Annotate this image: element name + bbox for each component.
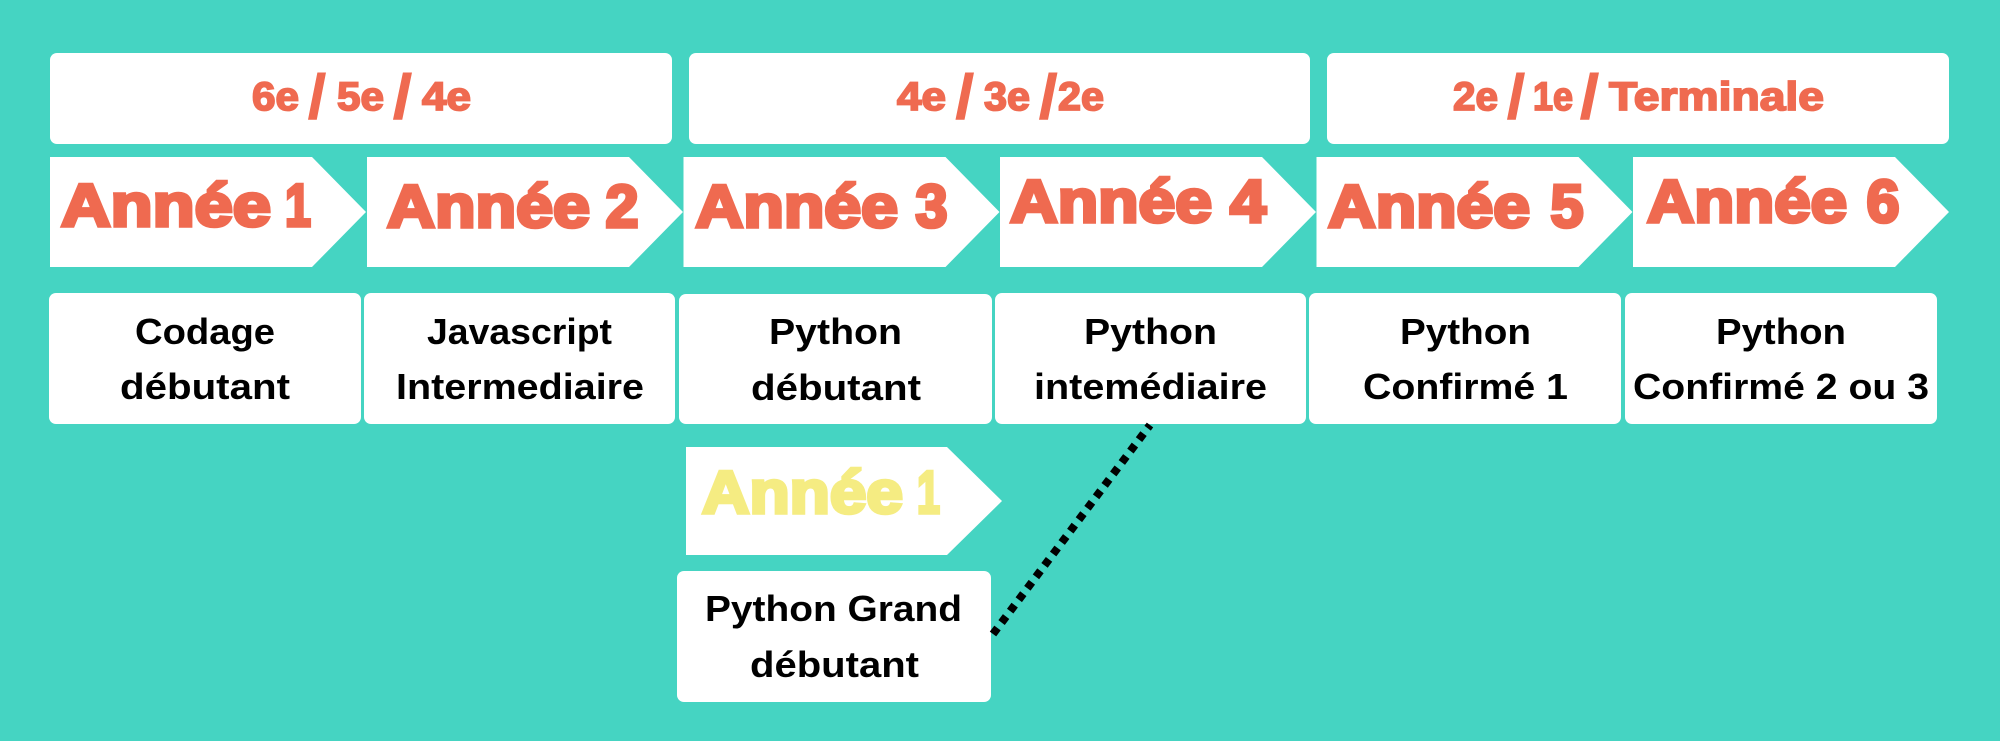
panel: school levels 4e / 3e / 2e: 4e — [897, 75, 946, 119]
arrow: Année 3: 3 — [916, 173, 948, 240]
arrow: Année 5: Année — [1328, 173, 1530, 240]
panel: Python Confirmé 2 ou 3: Python — [1716, 311, 1846, 352]
arrow: Année 4: 4 — [1230, 168, 1267, 235]
panel: Python intemédiaire — [995, 293, 1306, 424]
panel: Javascript Intermediaire: Javascript — [427, 311, 612, 352]
panel: Python Confirmé 2 ou 3 — [1625, 293, 1937, 424]
panel: Python débutant — [679, 294, 992, 424]
panel: Python Confirmé 1: Python — [1400, 311, 1531, 352]
arrow: Année 4: Année — [1010, 168, 1212, 235]
panel: Python Grand débutant: débutant — [750, 644, 919, 685]
panel: Python Grand débutant: Python Grand — [705, 588, 962, 629]
dotted connector line — [993, 425, 1150, 634]
arrow: Année 5: 5 — [1550, 173, 1584, 240]
panel: Python Grand débutant — [677, 571, 991, 702]
panel: Python Confirmé 2 ou 3: Confirmé 2 ou 3 — [1633, 366, 1929, 407]
arrow: yellow Année 1: 1 — [917, 459, 940, 526]
arrow: Année 2: Année — [387, 173, 590, 240]
panel: school levels 4e / 3e / 2e: / — [956, 63, 974, 132]
panel: school levels 4e / 3e / 2e: / — [1039, 63, 1058, 132]
panel: school levels 6e / 5e / 4e: 5e — [337, 75, 384, 119]
panel: Codage débutant — [49, 293, 361, 424]
panel: Python intemédiaire: intemédiaire — [1034, 366, 1267, 407]
panel: school levels 2e / 1e / Terminale: / — [1580, 63, 1599, 132]
panel: school levels 4e / 3e / 2e: 2e — [1058, 75, 1104, 119]
panel: Python débutant: Python — [769, 311, 902, 352]
arrow: Année 3: Année — [696, 173, 898, 240]
arrow: Année 1 — [50, 157, 366, 267]
panel: Python intemédiaire: Python — [1084, 311, 1217, 352]
arrow: Année 6 — [1633, 157, 1949, 267]
arrow: Année 1: Année — [61, 172, 271, 239]
arrow: Année 6: Année — [1647, 168, 1847, 235]
panel: school levels 6e / 5e / 4e: 4e — [422, 75, 471, 119]
panel: Javascript Intermediaire — [364, 293, 675, 424]
panel: school levels 4e / 3e / 2e: 3e — [984, 75, 1030, 119]
panel: Python débutant: débutant — [751, 367, 921, 408]
arrow: Année 2: 2 — [606, 173, 638, 240]
panel: school levels 2e / 1e / Terminale — [1327, 53, 1949, 144]
panel: school levels 6e / 5e / 4e: 6e — [252, 75, 299, 119]
arrow: Année 1: 1 — [285, 172, 311, 239]
panel: school levels 6e / 5e / 4e — [50, 53, 672, 144]
panel: school levels 2e / 1e / Terminale: / — [1507, 63, 1525, 132]
arrow: Année 3 — [684, 157, 1000, 267]
panel: Codage débutant: Codage — [135, 311, 275, 352]
panel: school levels 2e / 1e / Terminale: 2e — [1453, 75, 1498, 119]
arrow: yellow Année 1: Année — [702, 459, 903, 526]
arrow: Année 6: 6 — [1866, 168, 1900, 235]
panel: Codage débutant: débutant — [120, 366, 290, 407]
arrow: Année 2 — [367, 157, 683, 267]
panel: school levels 6e / 5e / 4e: / — [308, 63, 326, 132]
arrow: Année 5 — [1316, 157, 1632, 267]
panel: school levels 4e / 3e / 2e — [689, 53, 1310, 144]
panel: school levels 6e / 5e / 4e: / — [393, 63, 412, 132]
panel: Python Confirmé 1 — [1309, 293, 1621, 424]
arrow: yellow Année 1 — [686, 447, 1002, 555]
panel: school levels 2e / 1e / Terminale: Terminale — [1609, 75, 1824, 119]
panel: Python Confirmé 1: Confirmé 1 — [1363, 366, 1568, 407]
arrow: Année 4 — [1000, 157, 1316, 267]
panel: school levels 2e / 1e / Terminale: 1e — [1533, 75, 1573, 119]
panel: Javascript Intermediaire: Intermediaire — [396, 366, 644, 407]
